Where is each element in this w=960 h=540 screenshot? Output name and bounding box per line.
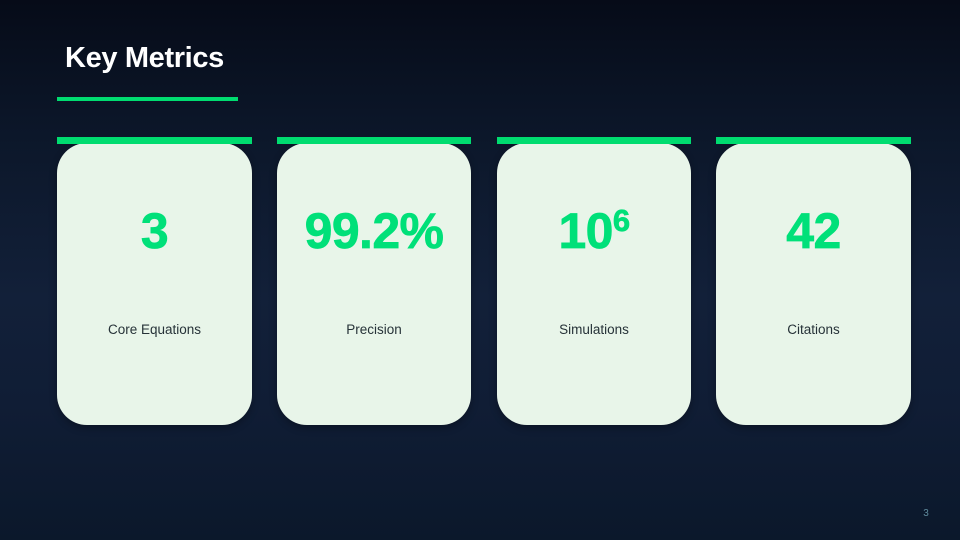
panel: citations: [716, 137, 912, 428]
title: Key Metrics: [65, 42, 224, 74]
card accent bar: [57, 137, 252, 144]
metric value: 3: [141, 203, 168, 259]
card background: [497, 143, 691, 425]
title underline: [57, 97, 238, 101]
metric value: 42: [786, 203, 841, 259]
card background: [277, 143, 471, 425]
panel: simulations: [496, 137, 692, 428]
card background: [57, 143, 252, 425]
panel: precision: [276, 137, 472, 428]
page number: 3: [923, 508, 929, 519]
metric label: Precision: [346, 322, 402, 337]
metric label: Simulations: [559, 322, 629, 337]
card background: [716, 143, 911, 425]
metric label: Core Equations: [108, 322, 201, 337]
panel: core equations: [56, 137, 252, 428]
card accent bar: [497, 137, 691, 144]
metric value: 106: [558, 203, 630, 259]
card accent bar: [716, 137, 911, 144]
card accent bar: [277, 137, 471, 144]
metric value: 99.2%: [305, 203, 443, 259]
metric label: Citations: [787, 322, 840, 337]
